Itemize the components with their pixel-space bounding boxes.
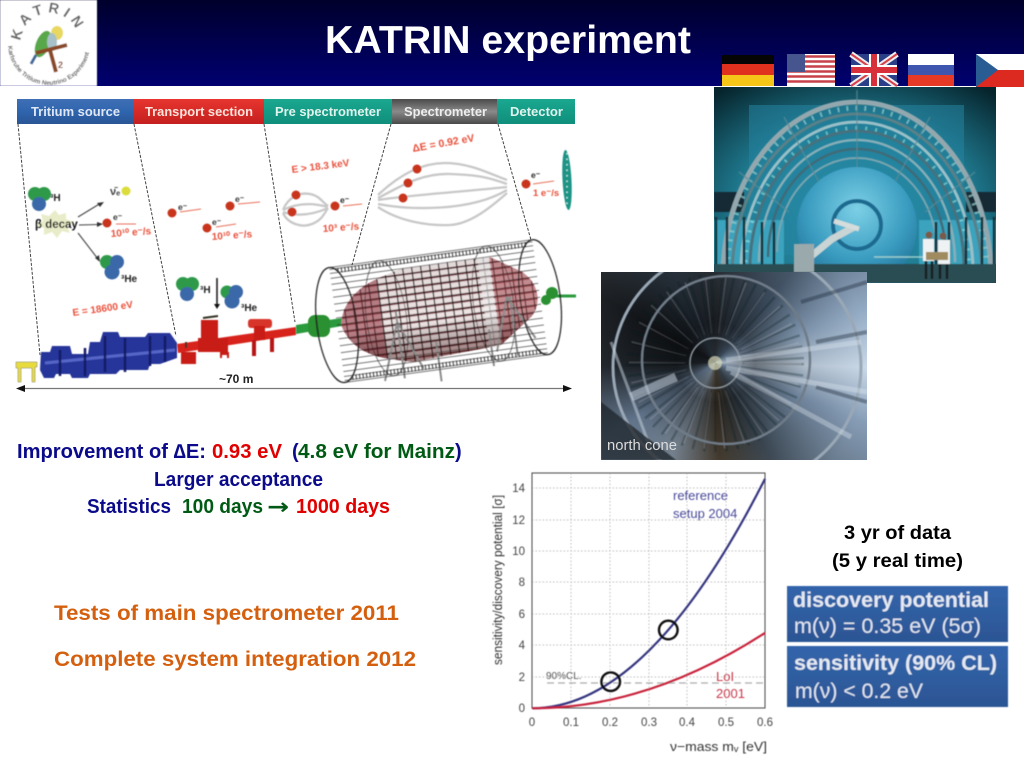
result box: discovery potential [787,586,1008,642]
beamline: tritium source in blue [40,332,177,378]
result box: sensitivity: m(ν) < 0.2 eV [795,680,923,703]
panel: KATRIN beamline diagram [16,99,576,397]
tritium source processes: E = 18600 eV [72,300,134,319]
flag: USA [787,54,835,86]
transport section electrons: ³H [200,285,211,296]
title: KATRIN experiment [325,19,691,62]
chart frame [532,473,765,708]
flag: Germany [722,55,774,86]
improvement of energy resolution: ( [292,441,299,463]
y axis labels: 2 [519,672,525,684]
section header: Detector [497,99,575,124]
KATRIN logo: 2 [58,60,63,70]
photo: north cone of spectrometer [601,247,867,487]
section header: Tritium source: Tritium source [31,104,120,119]
curve: reference setup 2004: setup 2004 [673,506,737,521]
pre spectrometer field lines: 10³ e⁻/s [322,221,360,235]
air coil cage [309,237,568,385]
sensitivity chart [491,473,773,754]
detector [522,150,573,210]
curve: LoI 2001: 2001 [716,686,745,701]
transport section electrons: e⁻ [178,202,188,212]
result box: discovery potential: discovery potential [793,589,989,612]
length arrow: ~70 m: ~70 m [219,372,253,386]
KATRIN logo: KATRIN [10,2,84,40]
curve: LoI 2001 [532,633,765,708]
flag: UK [851,54,897,86]
transport section electrons: e⁻ [235,194,245,204]
section header: Transport section [134,99,264,124]
beamline: green pumping section [296,287,576,337]
improvement of energy resolution [17,441,462,463]
y axis labels [512,483,526,715]
statistics: → [267,495,289,520]
section header: Spectrometer [392,99,497,124]
length arrow: ~70 m [16,372,572,392]
result box: sensitivity [787,646,1008,707]
statistics: Statistics [87,496,171,518]
text block: improvements [17,441,462,520]
x axis labels [529,717,773,729]
90% CL line: 90%CL. [546,671,582,682]
section header: Detector: Detector [510,104,563,119]
tritium source processes: ³H [50,193,61,204]
x axis title: ν−mass mᵥ [eV] [670,739,767,754]
tritium source processes [28,186,152,319]
y axis labels: 10 [512,546,525,558]
tritium source processes: β decay [35,219,78,231]
tritium source processes: e⁻ [113,212,123,222]
spectrometer field lines: ΔE = 0.92 eV [411,132,475,155]
x axis labels: 0.6 [757,717,773,729]
detector: 1 e⁻/s [533,188,559,199]
y axis labels: 6 [519,609,525,621]
x axis labels: 0.1 [563,717,579,729]
pre spectrometer field lines: E > 18.3 keV [291,158,350,176]
marker circles [601,621,678,691]
caption: data taking time: 3 yr of data [844,522,951,544]
x axis labels: 0.2 [602,717,618,729]
spectrometer field lines [378,132,507,225]
improvement of energy resolution: 0.93 eV [212,441,283,463]
larger acceptance: Larger acceptance [154,469,323,491]
beamline: rear section [16,362,37,382]
spectrometer vessel [335,251,544,371]
caption: data taking time [832,522,963,572]
result box: discovery potential: m(ν) = 0.35 eV (5σ) [794,615,981,638]
photo: north cone of spectrometer: north cone [607,437,677,454]
section header: Tritium source [17,99,134,124]
curve: reference setup 2004: reference [673,488,728,503]
x axis labels: 0.4 [679,717,696,729]
y axis title: sensitivity/discovery potential [σ] [491,495,505,665]
x axis labels: 0.3 [641,717,657,729]
y axis labels: 14 [512,483,526,495]
flag: Russia [908,54,954,86]
section header: Pre spectrometer [264,99,392,124]
transport section electrons: ³He [241,303,258,314]
tritium source processes: ν̄ₑ [110,186,120,198]
improvement of energy resolution: 4.8 eV for Mainz [298,441,455,463]
detector: e⁻ [531,170,541,180]
x axis labels: 0.5 [718,717,734,729]
flag: Czech Republic [976,54,1024,87]
tests of main spectrometer: Tests of main spectrometer 2011 [54,601,399,625]
transport section electrons: 10¹⁰ e⁻/s [211,229,253,243]
KATRIN logo: Karlsruhe Tritium Neutrino Experiment [8,46,90,86]
pre spectrometer field lines [283,158,362,235]
transport section electrons: e⁻ [212,217,222,227]
text block: schedule [54,601,416,671]
section header: Spectrometer: Spectrometer [404,104,487,119]
main spectrometer with air coil cage [309,237,569,397]
photo: spectrometer hall [714,87,996,287]
y axis labels: 4 [519,640,526,652]
y axis labels: 8 [519,577,525,589]
dashed projection lines [18,124,531,355]
curve: reference setup 2004 [532,479,765,708]
header band [0,0,1024,86]
vessel supports [376,294,540,389]
chart grid [532,473,765,708]
transport section electrons [168,194,260,314]
section header: Transport section: Transport section [145,104,253,119]
y axis labels: 12 [512,515,525,527]
statistics: 100 days [182,496,263,518]
x axis labels: 0 [529,717,535,729]
beamline: transport section in red [177,316,296,364]
KATRIN logo [0,0,98,86]
statistics: 1000 days [296,496,390,518]
improvement of energy resolution: ) [455,441,462,463]
tritium source processes: 10¹⁰ e⁻/s [110,226,152,240]
curve: LoI 2001: LoI [716,669,734,684]
statistics [87,495,390,520]
complete system integration: Complete system integration 2012 [54,647,416,671]
result box: sensitivity: sensitivity (90% CL) [794,652,997,675]
y axis labels: 0 [519,703,525,715]
improvement of energy resolution: Improvement of ∆E: [17,441,206,463]
caption: data taking time: (5 y real time) [832,550,963,572]
tritium source processes: ³He [121,274,138,285]
section header: Pre spectrometer: Pre spectrometer [275,104,381,119]
pre spectrometer field lines: e⁻ [340,195,350,205]
